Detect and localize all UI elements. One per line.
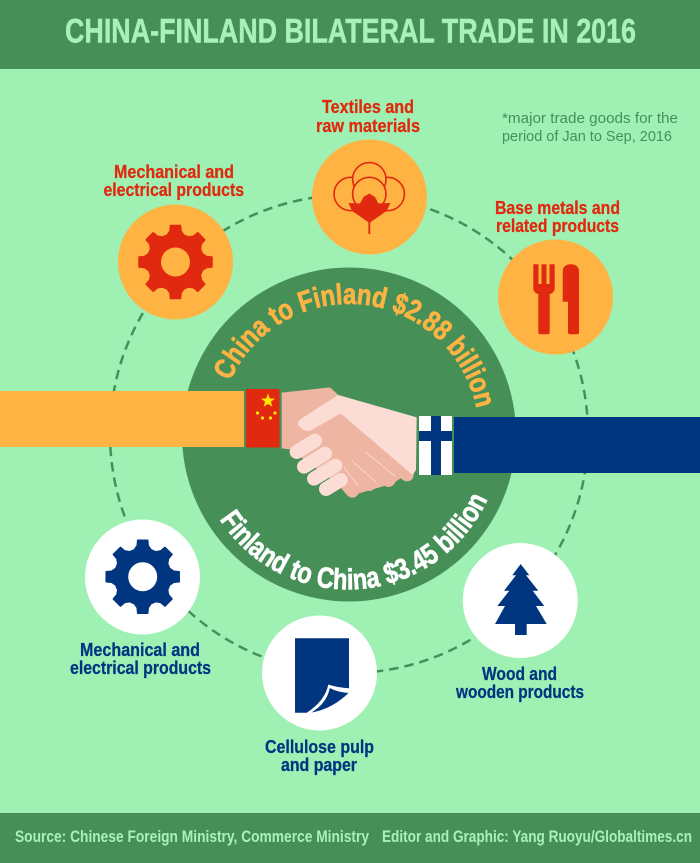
header band with title	[0, 0, 700, 69]
label: mechanical and electrical exports from Finland	[70, 640, 211, 678]
central green circle	[182, 268, 516, 602]
label: mechanical and electrical exports from Finland: electrical products	[70, 658, 211, 678]
curved text: China to Finland: China to Finland $2.88 billion	[214, 282, 491, 408]
curved text: Finland to China: Finland to China $3.45 billion	[220, 494, 488, 590]
icon: paper sheet on white circle	[262, 616, 377, 730]
label: wood: Wood and	[482, 664, 557, 684]
label: base metals	[495, 198, 620, 236]
icon: fork and knife on orange circle	[498, 240, 613, 354]
label: cellulose pulp and paper	[265, 737, 374, 775]
label: mechanical and electrical exports from Finland: Mechanical and	[80, 640, 200, 660]
label: wood: wooden products	[455, 682, 584, 702]
icon: blue gear on white circle	[85, 520, 200, 634]
label: textiles	[316, 97, 420, 136]
note: trade period: period of Jan to Sep, 2016	[502, 128, 672, 145]
China sleeve and cuff with flag	[0, 389, 280, 448]
icon: cotton on orange circle	[312, 140, 427, 254]
label: cellulose pulp and paper: and paper	[281, 755, 357, 775]
label: cellulose pulp and paper: Cellulose pulp	[265, 737, 374, 757]
icon: fir tree on white circle	[463, 543, 578, 658]
label: mechanical and electrical exports from China: Mechanical and	[114, 162, 234, 182]
footer band with source: Source: Chinese Foreign Ministry, Commerce Ministry	[15, 828, 370, 846]
footer band with source	[0, 813, 700, 863]
label: textiles: raw materials	[316, 116, 420, 136]
note: trade period: *major trade goods for the	[502, 110, 678, 127]
label: mechanical and electrical exports from China: electrical products	[104, 180, 244, 200]
note: trade period	[502, 110, 678, 145]
Finland sleeve and cuff with flag	[419, 416, 700, 475]
label: base metals: Base metals and	[495, 198, 620, 218]
icon: red gear on orange circle	[118, 204, 233, 320]
label: wood	[455, 664, 584, 702]
label: mechanical and electrical exports from China	[104, 162, 244, 200]
handshake	[282, 387, 417, 495]
label: base metals: related products	[496, 216, 619, 236]
label: textiles: Textiles and	[322, 97, 414, 117]
